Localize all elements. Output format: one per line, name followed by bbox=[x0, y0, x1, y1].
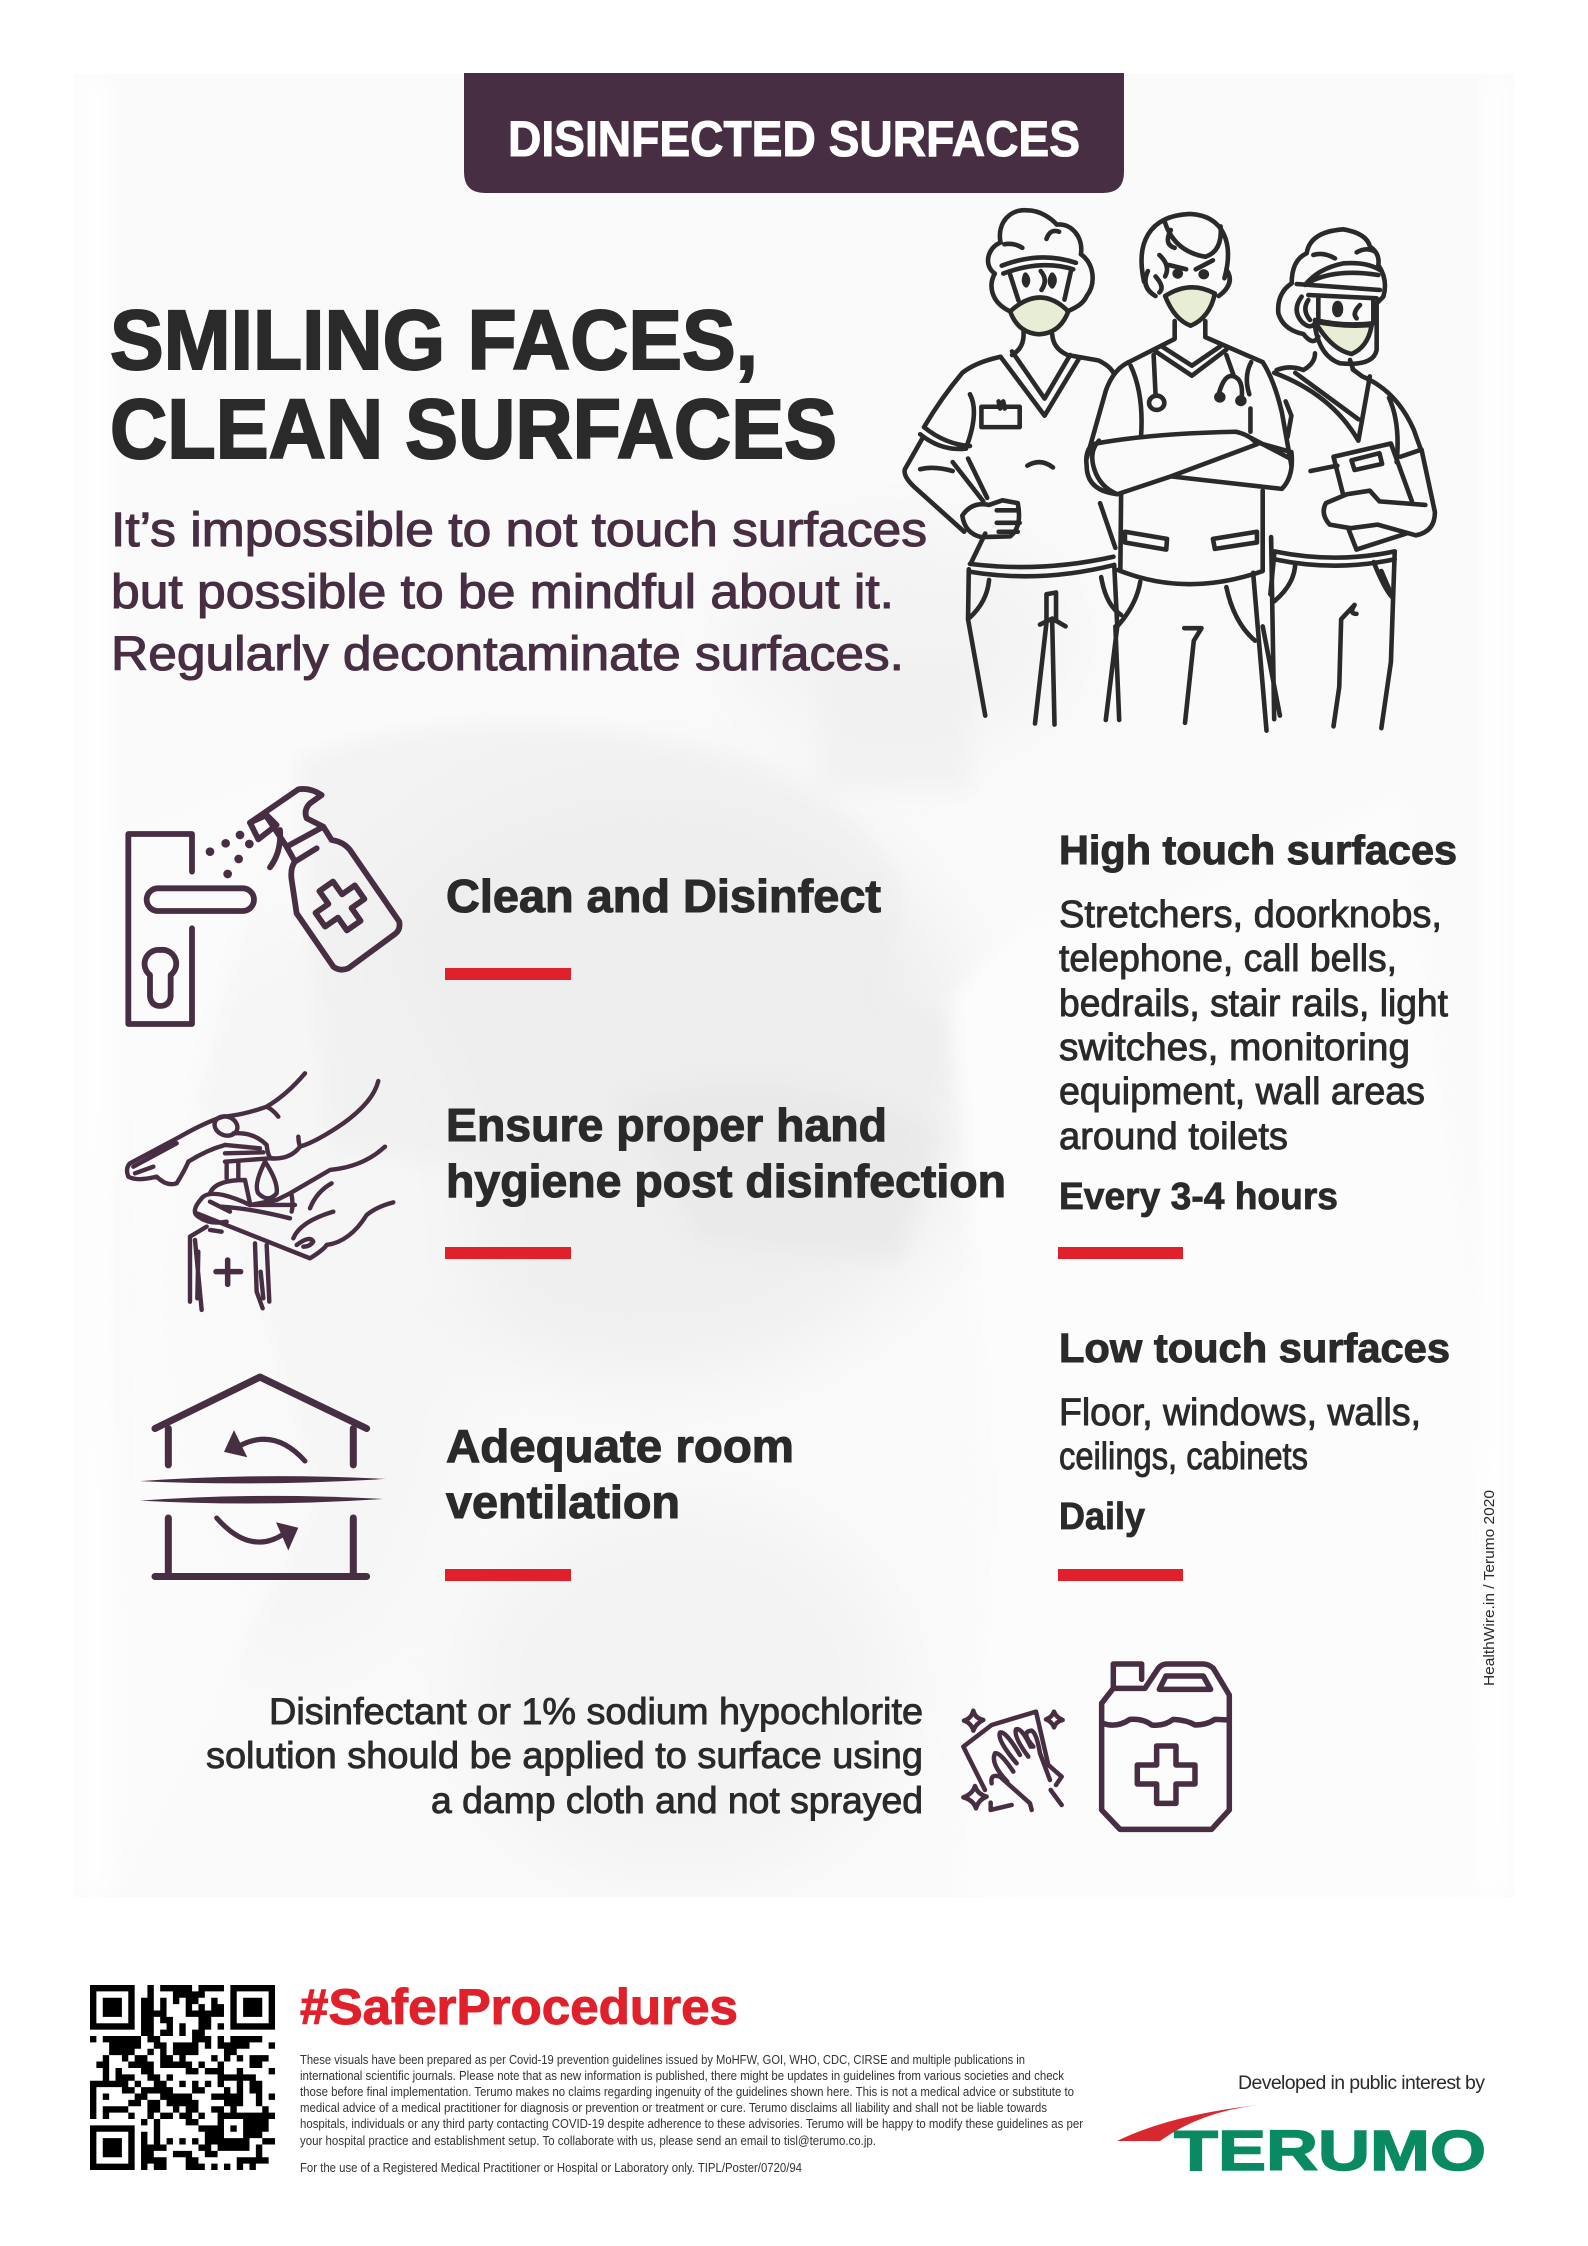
step: ensure proper hand hygiene: Ensure proper hand bbox=[446, 1099, 887, 1151]
panel: faded photo background bbox=[208, 528, 1065, 1882]
text block: high touch surfaces: switches, monitoring bbox=[1059, 1027, 1410, 1069]
text block: low touch surfaces: ceilings, cabinets bbox=[1059, 1436, 1308, 1478]
step: adequate room ventilation: Adequate room bbox=[446, 1420, 794, 1472]
logo: Terumo bbox=[1117, 2105, 1486, 2183]
step: clean and disinfect: Clean and Disinfect bbox=[446, 870, 881, 922]
text block: high touch surfaces: telephone, call bells, bbox=[1059, 938, 1397, 980]
icon: disinfectant jerry can bbox=[1102, 1664, 1229, 1829]
text block: low touch surfaces: Low touch surfaces bbox=[1059, 1325, 1450, 1371]
icon: hands using sanitizer pump bbox=[127, 1073, 393, 1310]
heading banner: Disinfected Surfaces bbox=[464, 73, 1124, 193]
worker left bbox=[988, 210, 1093, 311]
text block: application note: a damp cloth and not sprayed bbox=[431, 1780, 923, 1821]
subtitle text block: Regularly decontaminate surfaces. bbox=[111, 628, 904, 681]
heading banner: Disinfected Surfaces: DISINFECTED SURFACES bbox=[508, 111, 1080, 167]
QR code bbox=[90, 1988, 275, 2167]
subtitle text block: but possible to be mindful about it. bbox=[111, 566, 894, 619]
disclaimer text block: For the use of a Registered Medical Practitioner or Hospital or Laboratory only. TIPL/Poster/0720/94 bbox=[300, 2161, 802, 2175]
step: adequate room ventilation bbox=[445, 1420, 794, 1581]
subtitle text block: It’s impossible to not touch surfaces bbox=[111, 504, 927, 557]
title: Smiling faces, clean surfaces bbox=[110, 293, 837, 476]
disclaimer text block: hospitals, individuals or any third party contacting COVID-19 despite adherence to these advisories. Terumo will be happy to modify these guidelines as per bbox=[300, 2117, 1083, 2131]
illustration: three healthcare workers in masks bbox=[905, 210, 1435, 731]
text block: low touch surfaces: Daily bbox=[1059, 1496, 1145, 1538]
title: Smiling faces, clean surfaces: CLEAN SURFACES bbox=[110, 382, 837, 476]
icon: hand wiping with cloth bbox=[963, 1711, 1063, 1810]
masks bbox=[1010, 287, 1215, 334]
disclaimer text block: international scientific journals. Please note that as new information is published, there might be updates in guidelines from various societies and check bbox=[300, 2069, 1065, 2083]
step: adequate room ventilation: ventilation bbox=[446, 1476, 680, 1528]
vertical credit text: HealthWire.in / Terumo 2020 bbox=[1481, 1490, 1498, 1686]
subtitle text block bbox=[111, 504, 927, 681]
text block: high touch surfaces: High touch surfaces bbox=[1059, 827, 1457, 873]
icon: spray bottle disinfecting door handle bbox=[128, 789, 400, 1024]
text block: high touch surfaces: Stretchers, doorknobs, bbox=[1059, 894, 1442, 936]
text block: low touch surfaces: Floor, windows, walls, bbox=[1059, 1392, 1421, 1434]
text block: application note: Disinfectant or 1% sodium hypochlorite bbox=[269, 1691, 923, 1732]
worker middle bbox=[1142, 214, 1230, 296]
disclaimer text block: those before final implementation. Terumo makes no claims regarding ingenuity of the guidelines shown here. This is not a medical advice or substitute to bbox=[300, 2085, 1074, 2099]
text block: high touch surfaces: equipment, wall areas bbox=[1059, 1071, 1425, 1113]
disclaimer text block bbox=[300, 2053, 1083, 2175]
disclaimer text block: These visuals have been prepared as per Covid-19 prevention guidelines issued by MoHFW, GOI, WHO, CDC, CIRSE and multiple publications in bbox=[300, 2053, 1025, 2067]
text block: application note bbox=[206, 1691, 923, 1821]
hashtag: SaferProcedures: #SaferProcedures bbox=[300, 1979, 738, 2035]
text block: high touch surfaces: Every 3-4 hours bbox=[1059, 1176, 1338, 1218]
icon: house with air circulating bbox=[140, 1377, 386, 1576]
disclaimer text block: medical advice of a medical practitioner for diagnosis or prevention or treatment or cure. Terumo disclaims all liability and shall not be liable towards bbox=[300, 2101, 1047, 2115]
text block: high touch surfaces: around toilets bbox=[1059, 1116, 1288, 1158]
title: Smiling faces, clean surfaces: SMILING FACES, bbox=[110, 293, 758, 387]
worker right head with face shield bbox=[1277, 229, 1385, 370]
disclaimer text block: your hospital practice and establishment setup. To collaborate with us, please send an email to tisl@terumo.co.jp. bbox=[300, 2134, 876, 2148]
step: clean and disinfect bbox=[445, 870, 881, 980]
text block: high touch surfaces: bedrails, stair rails, light bbox=[1059, 983, 1448, 1025]
worker right body bbox=[1274, 369, 1422, 462]
logo: Terumo: TERUMO bbox=[1174, 2119, 1486, 2183]
text block: high touch surfaces bbox=[1058, 827, 1457, 1259]
text block: application note: solution should be applied to surface using bbox=[206, 1735, 923, 1776]
text block: low touch surfaces bbox=[1058, 1325, 1450, 1581]
step: ensure proper hand hygiene bbox=[445, 1099, 1006, 1259]
credit line: developed in public interest: Developed in public interest by bbox=[1238, 2072, 1485, 2094]
step: ensure proper hand hygiene: hygiene post disinfection bbox=[446, 1155, 1006, 1207]
